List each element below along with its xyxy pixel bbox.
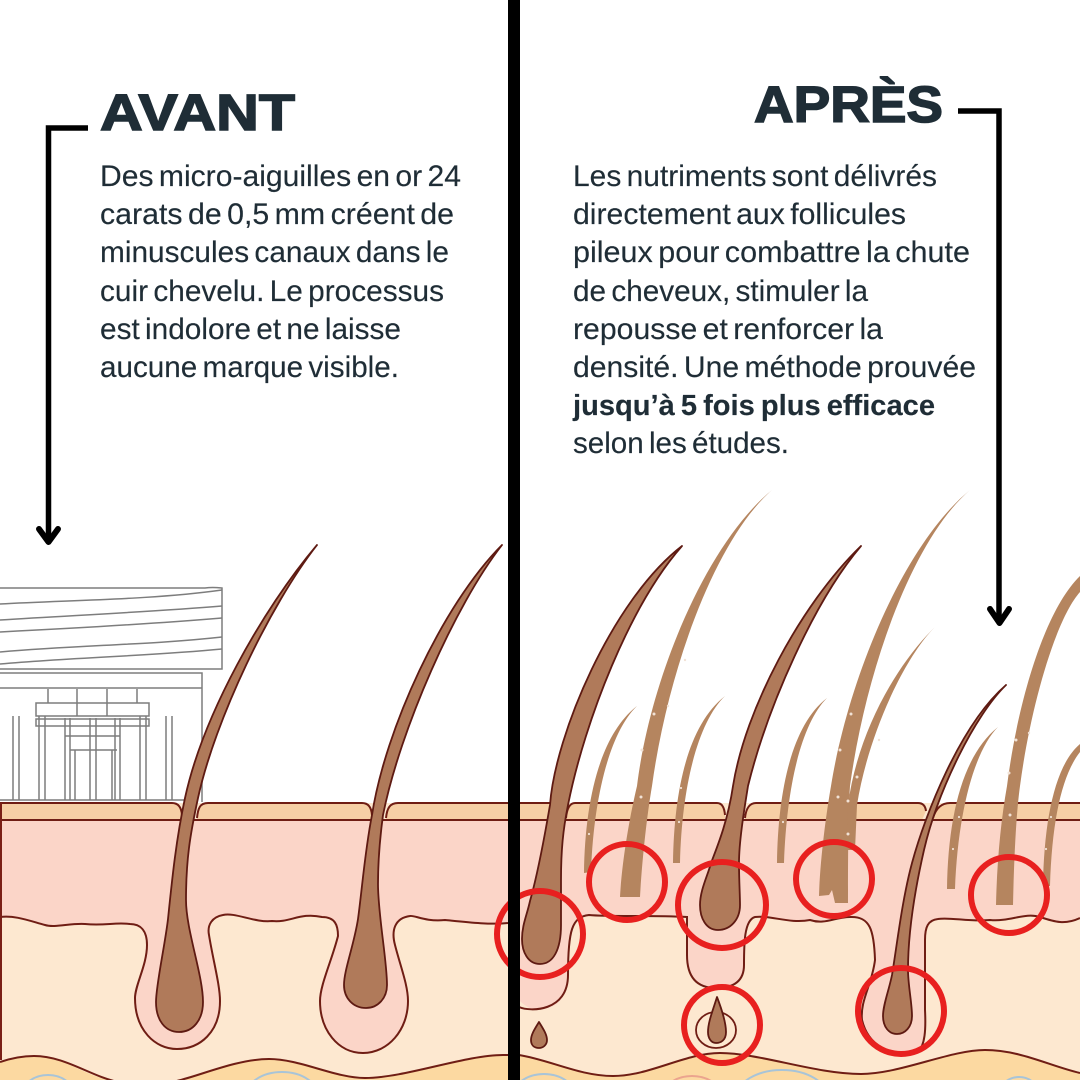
fat layer (0, 1050, 1080, 1080)
text block: après: directement aux follicules (573, 198, 906, 231)
hairs: après, dark (522, 546, 1006, 1048)
arrow: après (958, 111, 1009, 623)
text block: après: repousse et renforcer la (573, 313, 883, 346)
hairs: avant (156, 545, 502, 1032)
skin base (0, 803, 1080, 1080)
text block: après: pileux pour combattre la chute (573, 236, 970, 269)
detached droplet (531, 1022, 547, 1048)
text block: après: de cheveux, stimuler la (573, 275, 868, 308)
hair 3 with bulb (522, 546, 682, 964)
text block: avant: est indolore et ne laisse (100, 313, 401, 346)
icon: microneedle device (0, 588, 222, 802)
hair dots (588, 659, 1052, 850)
arrow: avant (39, 128, 88, 542)
text block: avant: minuscules canaux dans le (100, 236, 449, 269)
hair 1 (156, 545, 317, 1032)
text block: avant (100, 160, 461, 384)
dermis layer (0, 820, 1080, 1053)
dermis outline (0, 914, 1080, 1053)
text block: après: jusqu’à 5 fois plus efficace (572, 390, 935, 422)
small follicle bud (696, 1012, 736, 1048)
heading: après: APRÈS (754, 76, 943, 133)
text block: après (572, 160, 976, 460)
divider (508, 0, 520, 1080)
text block: avant: Des micro-aiguilles en or 24 (100, 160, 461, 193)
hair 4 with bulb (700, 546, 861, 930)
epidermis (0, 803, 1080, 820)
hair 2 (344, 545, 502, 1008)
text block: après: Les nutriments sont délivrés (573, 160, 937, 193)
text block: après: selon les études. (573, 427, 789, 460)
hairs: après, light regrowth (584, 490, 1080, 905)
text block: avant: carats de 0,5 mm créent de (100, 198, 454, 231)
fat lobes (22, 1070, 1039, 1080)
heading: avant: AVANT (100, 84, 295, 141)
illustration: skin layers (0, 803, 1080, 1080)
red circles (497, 842, 1047, 1063)
text block: après: densité. Une méthode prouvée (573, 351, 976, 384)
text block: avant: aucune marque visible. (100, 351, 399, 384)
hair 5 with bulb (883, 685, 1006, 1034)
epidermis outline (0, 803, 1080, 820)
text block: avant: cuir chevelu. Le processus (100, 275, 444, 308)
